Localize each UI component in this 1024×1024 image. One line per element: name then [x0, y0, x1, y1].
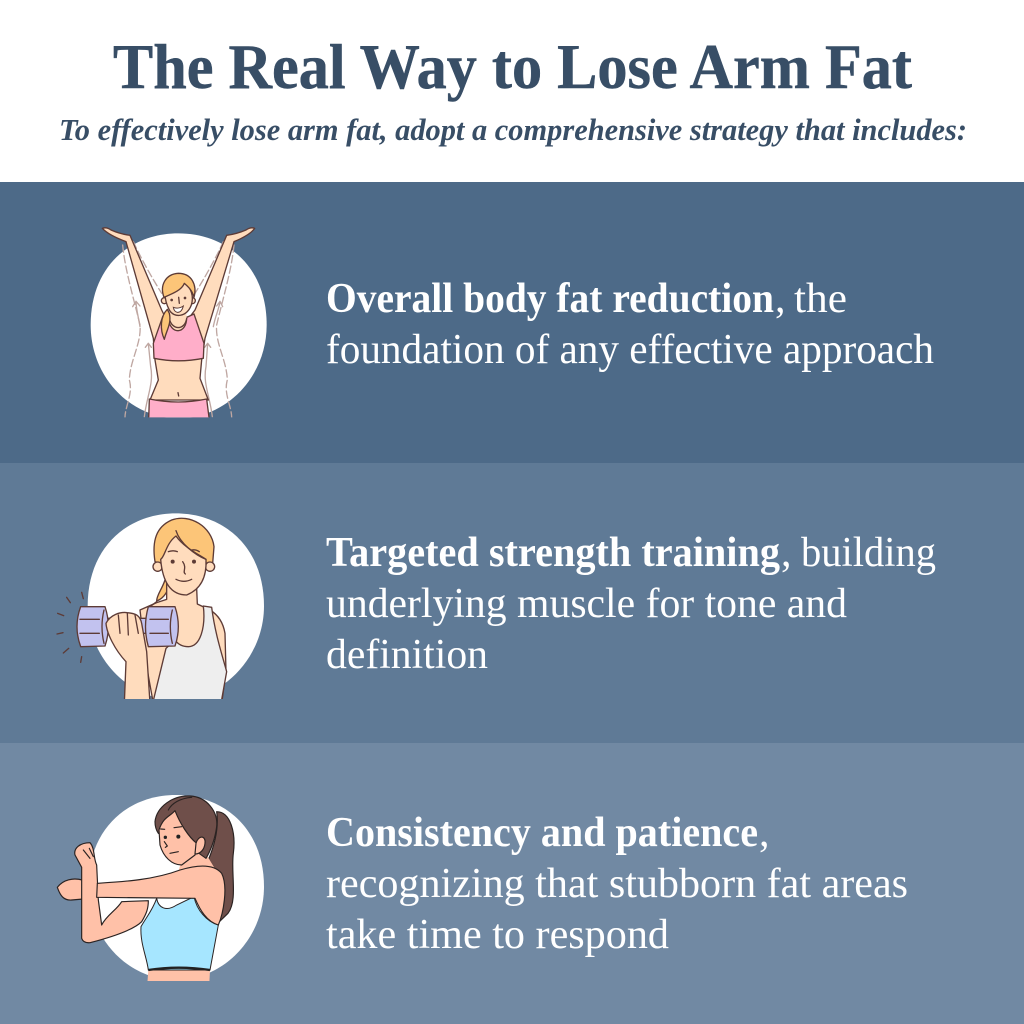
subtitle: To effectively lose arm fat, adopt a comprehensive strategy that includes:	[59, 112, 967, 147]
text: overall body fat reduction	[326, 276, 934, 373]
panel: consistency and patience	[0, 743, 1024, 1024]
text: consistency and patience	[326, 810, 908, 958]
top and waist	[141, 897, 218, 983]
text: overall body fat reduction: ,	[775, 276, 786, 322]
text: targeted strength training	[326, 530, 936, 678]
text: consistency and patience: Consistency and patience	[326, 810, 758, 856]
illustration: woman raising arms	[91, 228, 267, 420]
text: consistency and patience: take time to respond	[326, 912, 669, 958]
text: targeted strength training: Targeted strength training	[326, 530, 780, 576]
panel: targeted strength training	[0, 463, 1024, 743]
text: consistency and patience: ,	[759, 810, 770, 856]
stretched arm	[97, 866, 225, 925]
left fist	[57, 879, 83, 900]
text: targeted strength training: definition	[326, 632, 488, 678]
text: overall body fat reduction: foundation of any effective approach	[326, 327, 934, 373]
text: targeted strength training: ,	[781, 530, 792, 576]
arm and hand	[106, 612, 150, 703]
icon: dumbbell	[57, 592, 178, 662]
illustration: woman lifting dumbbell	[57, 513, 264, 703]
illustration: woman stretching arm	[57, 795, 264, 983]
text: overall body fat reduction: the	[794, 276, 847, 322]
panel: overall body fat reduction	[0, 182, 1024, 463]
text: overall body fat reduction: Overall body fat reduction	[326, 276, 774, 322]
text: consistency and patience: recognizing that stubborn fat areas	[326, 861, 908, 907]
title: The Real Way to Lose Arm Fat	[113, 32, 912, 102]
text: targeted strength training: building	[801, 530, 936, 576]
bent arm	[75, 843, 148, 943]
text: targeted strength training: underlying muscle for tone and	[326, 581, 847, 627]
